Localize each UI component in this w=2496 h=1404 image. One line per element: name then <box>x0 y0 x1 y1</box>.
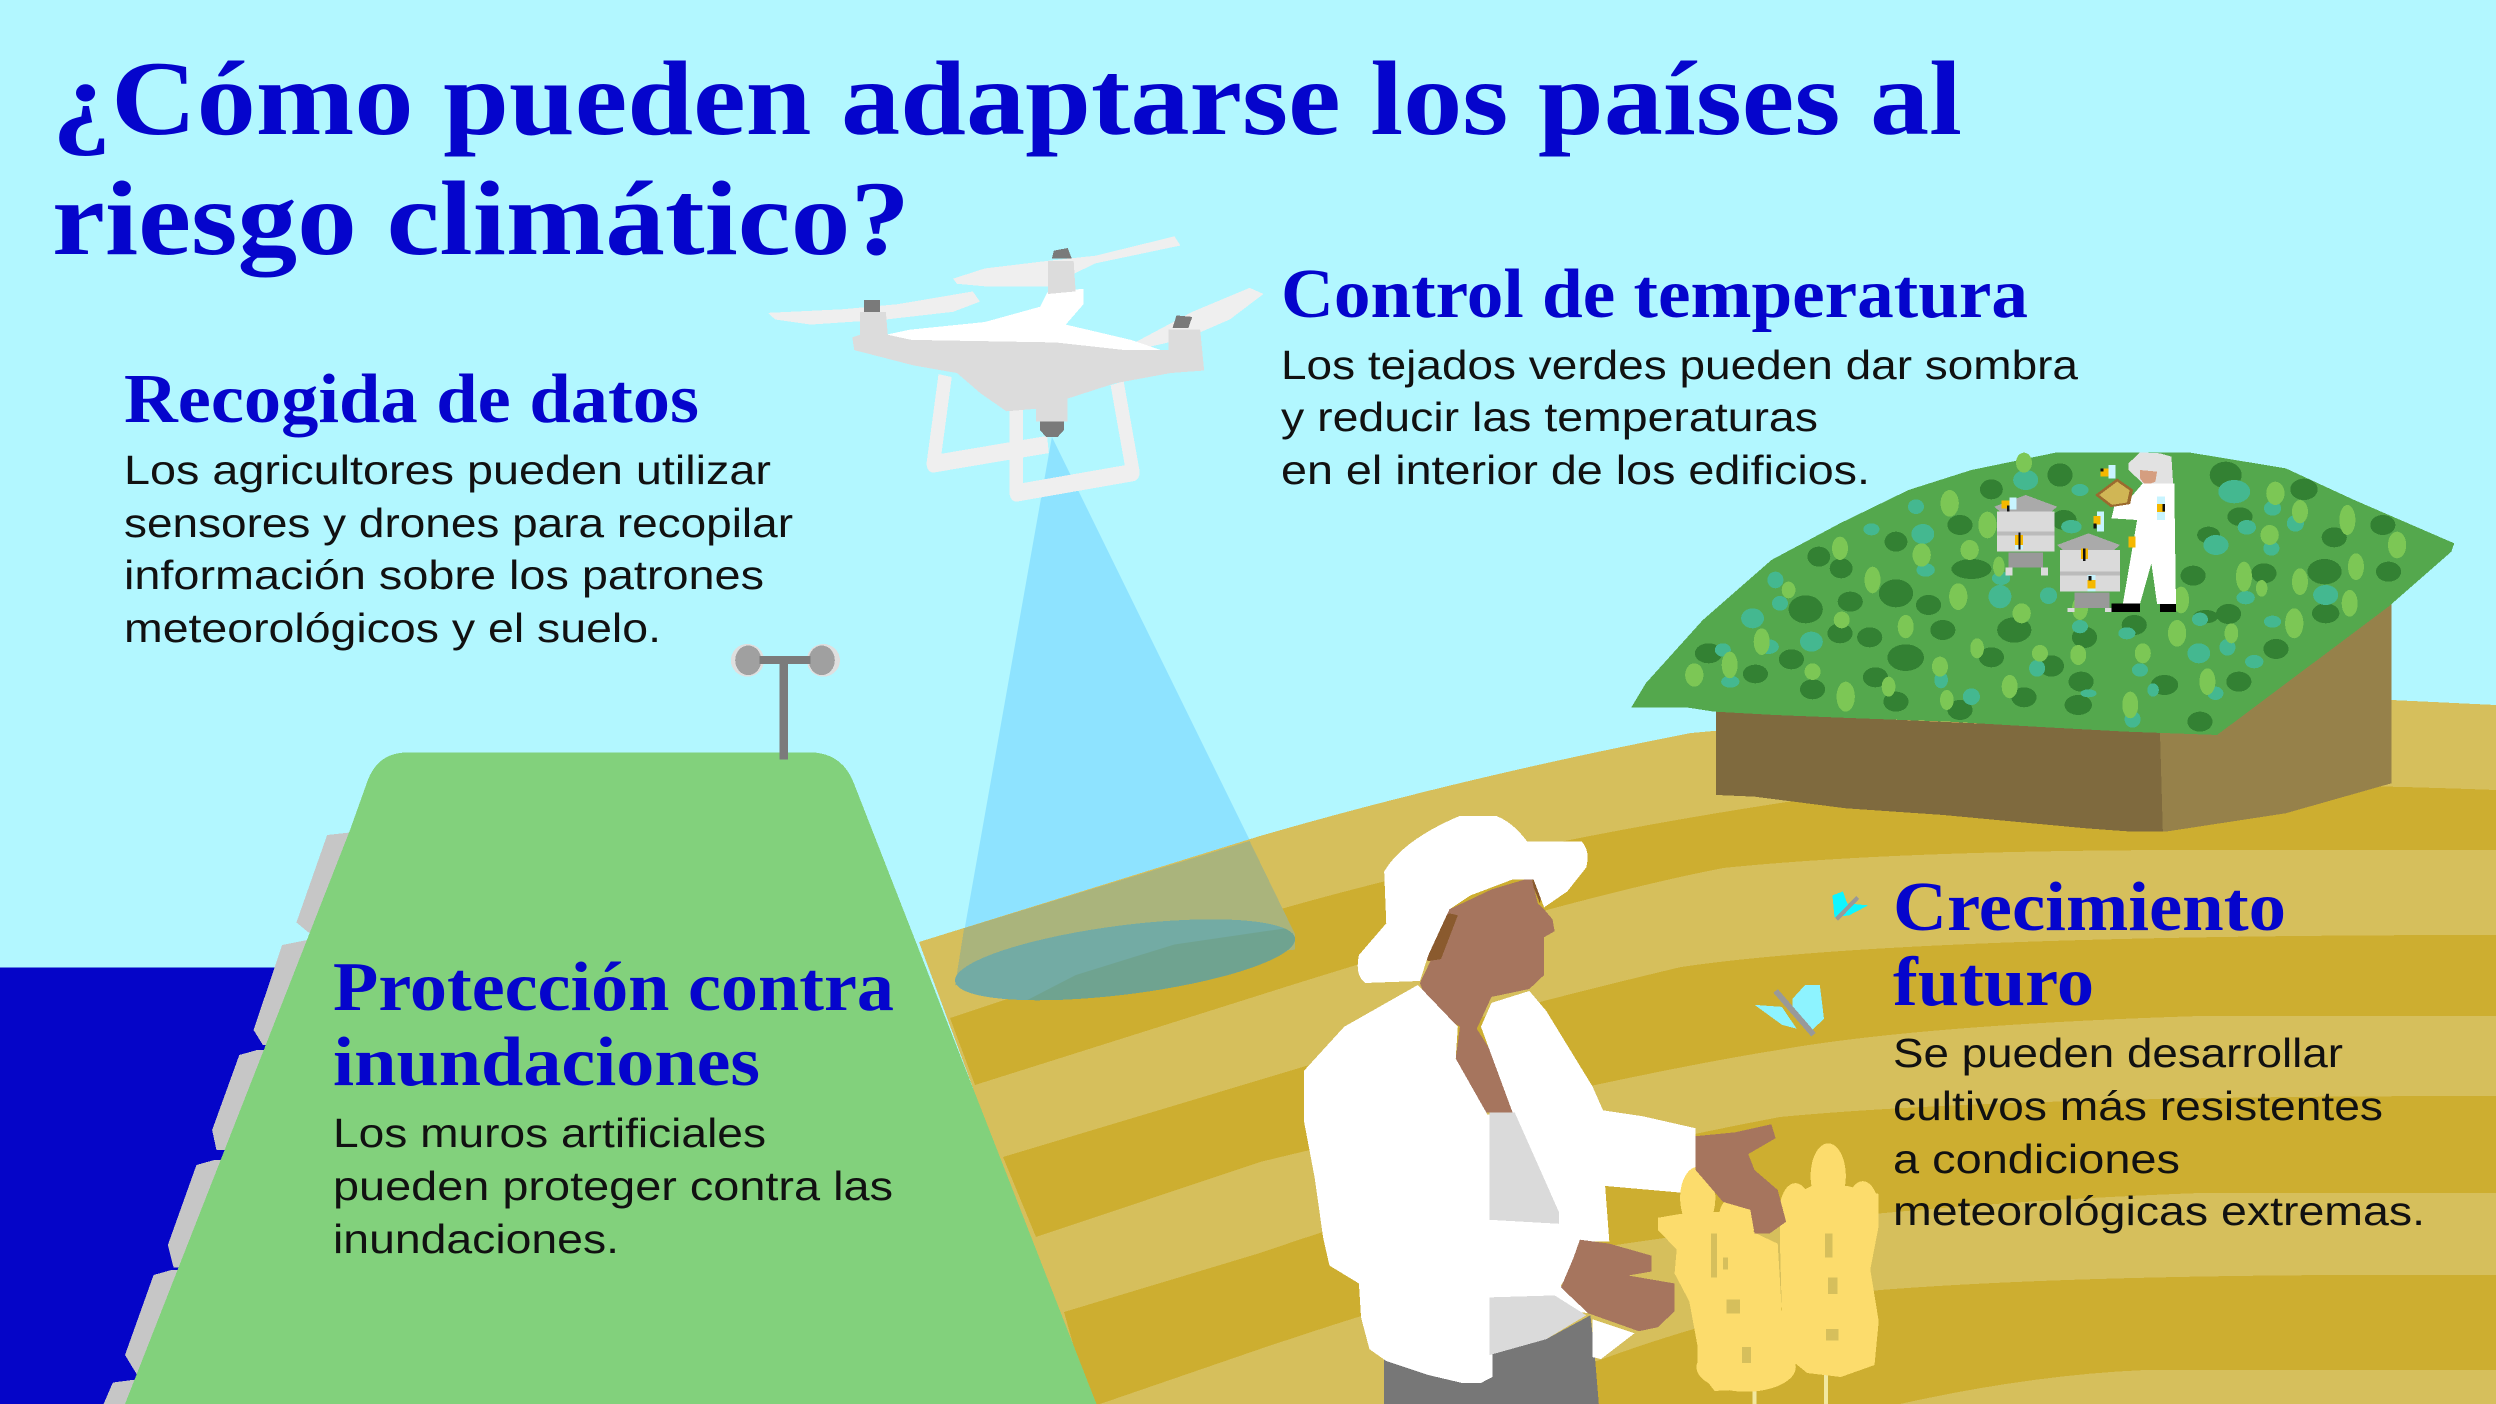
drone landing gear <box>933 376 1133 493</box>
body: Crecimiento futuro: a condiciones <box>1893 1136 2180 1182</box>
dark green plants <box>1695 462 2401 732</box>
body: Control de temperatura: en el interior de los edificios. <box>1281 447 1870 493</box>
farmer trousers <box>1384 1315 1599 1404</box>
butterfly cyan <box>1832 891 1868 919</box>
body: Crecimiento futuro: Se pueden desarrollar <box>1893 1030 2343 1076</box>
body: Recogida de datos: sensores y drones para recopilar <box>124 500 793 546</box>
heading: Crecimiento futuro: futuro <box>1893 944 2094 1021</box>
farmer head and neck <box>1420 878 1555 1112</box>
drone propellers <box>768 236 1263 350</box>
heading: Protección contra inundaciones: inundaciones <box>333 1024 760 1101</box>
rocks <box>104 832 371 1404</box>
text block: Crecimiento futuro <box>1893 869 2425 1234</box>
farmer lower hand <box>1561 1240 1675 1331</box>
weather sensor <box>731 644 840 759</box>
heading: Crecimiento futuro <box>1893 869 2286 1021</box>
body: Control de temperatura: y reducir las temperaturas <box>1281 394 1818 440</box>
wheat right <box>1779 1143 1879 1377</box>
beehive left <box>1994 495 2057 575</box>
green roof <box>1631 452 2454 735</box>
body: Recogida de datos: meteorológicos y el suelo. <box>124 605 661 651</box>
body: Crecimiento futuro: meteorológicas extremas. <box>1893 1188 2425 1234</box>
green wall <box>125 752 1096 1404</box>
body: Protección contra inundaciones: pueden proteger contra las <box>333 1163 893 1209</box>
farmer upper hand <box>1696 1124 1786 1234</box>
body: Crecimiento futuro <box>1893 1030 2425 1234</box>
text block: Protección contra inundaciones <box>333 949 894 1262</box>
farmer hair <box>1418 876 1544 961</box>
body: Recogida de datos <box>124 447 793 651</box>
teal plants <box>1715 470 2338 728</box>
green roof house <box>1631 452 2454 832</box>
body: Protección contra inundaciones: Los muros artificiales <box>333 1110 766 1156</box>
body: Control de temperatura <box>1281 342 2078 493</box>
butterfly pale blue <box>1755 985 1824 1035</box>
title: ¿Cómo pueden adaptarse los países al <box>52 40 1962 157</box>
wheat grain marks <box>1711 1234 1839 1363</box>
body: Recogida de datos: información sobre los patrones <box>124 552 764 598</box>
wheat stems <box>1755 1375 1826 1404</box>
heading: Recogida de datos: Recogida de datos <box>124 361 699 438</box>
house walls <box>1716 600 2391 832</box>
farmer hat <box>1358 816 1588 983</box>
heading: Protección contra inundaciones: Protección contra <box>333 949 894 1026</box>
title: riesgo climático? <box>52 160 910 277</box>
farmer and wheat <box>1304 816 1879 1404</box>
body: Protección contra inundaciones <box>333 1110 893 1262</box>
heading: Crecimiento futuro: Crecimiento <box>1893 869 2286 946</box>
bees <box>2002 465 2165 592</box>
farmer shirt <box>1304 985 1696 1383</box>
heading: Control de temperatura: Control de temperatura <box>1281 256 2028 333</box>
text block: Control de temperatura <box>1281 256 2078 493</box>
beekeeper <box>2097 452 2176 612</box>
wheat left <box>1658 1167 1799 1392</box>
body: Crecimiento futuro: cultivos más resistentes <box>1893 1083 2383 1129</box>
drone sensor beam <box>964 437 1250 932</box>
beehive right <box>2057 533 2120 612</box>
farm field with bands <box>919 700 2496 1404</box>
body: Recogida de datos: Los agricultores pueden utilizar <box>124 447 771 493</box>
text block: Recogida de datos <box>124 361 793 651</box>
heading: Protección contra inundaciones <box>333 949 894 1101</box>
title <box>52 40 1962 277</box>
drone body <box>852 248 1204 437</box>
sensor footprint on field <box>952 841 1298 1015</box>
sea <box>0 968 300 1404</box>
light green plants <box>1685 453 2406 718</box>
flood wall with rocks <box>104 752 1096 1404</box>
drone <box>768 236 1263 493</box>
body: Control de temperatura: Los tejados verdes pueden dar sombra <box>1281 342 2078 388</box>
tan patch behind wheat <box>1755 1230 1788 1293</box>
body: Protección contra inundaciones: inundaciones. <box>333 1216 619 1262</box>
